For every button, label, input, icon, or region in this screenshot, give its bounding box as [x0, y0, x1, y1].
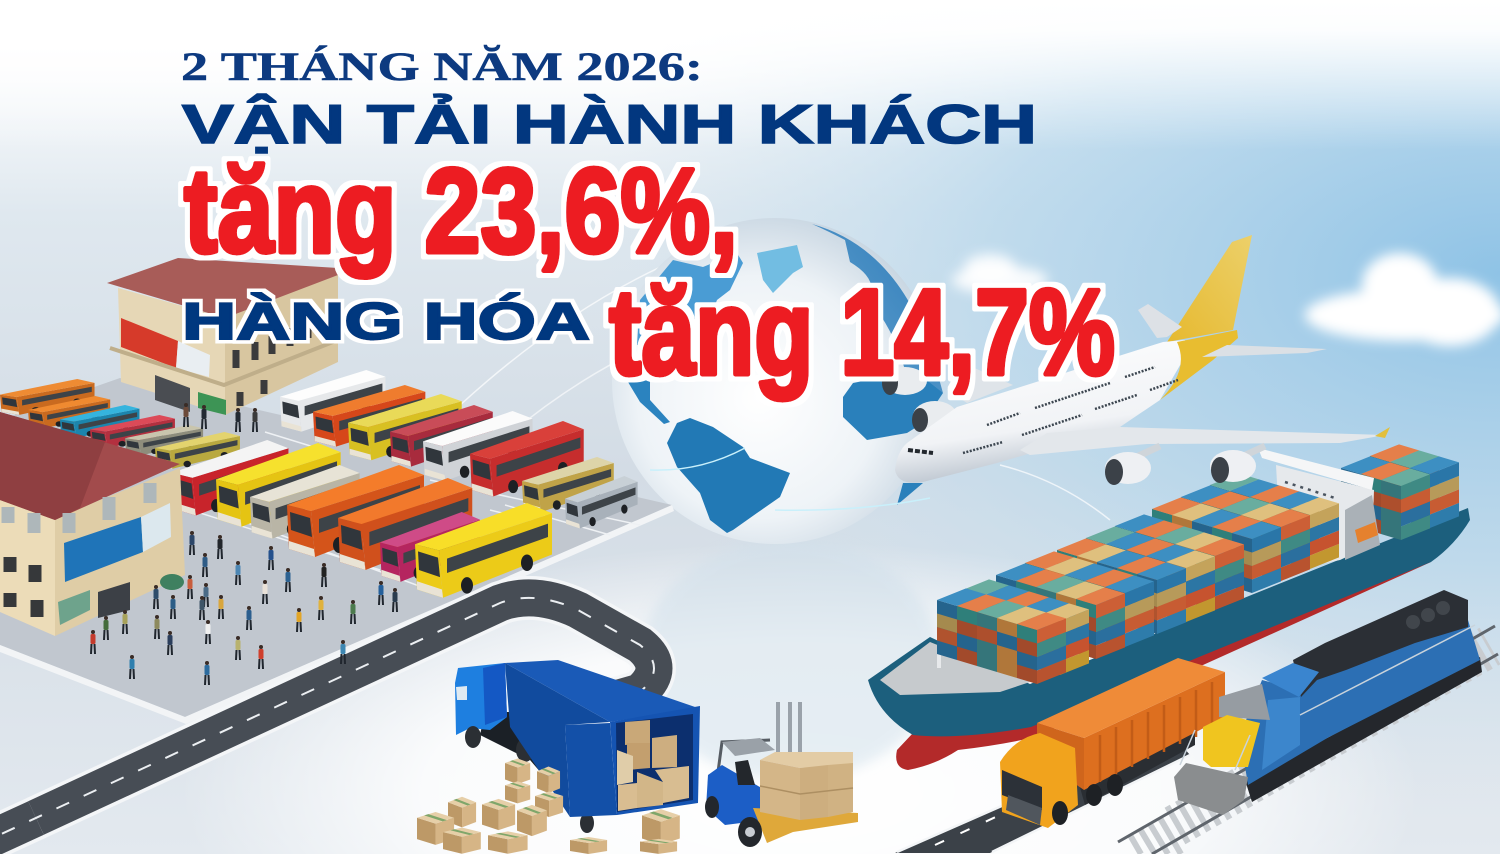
- middle row coaches: [280, 370, 638, 528]
- grey front hood: [1219, 684, 1270, 720]
- rear frame: [610, 706, 700, 815]
- near wing: [1020, 427, 1385, 455]
- north america landmass: [637, 253, 743, 345]
- windows: [963, 367, 1178, 453]
- container long side: [1084, 672, 1225, 790]
- roof: [107, 258, 338, 318]
- cab side highlight: [1262, 697, 1300, 770]
- container side: [505, 663, 610, 817]
- yellow nose: [1203, 715, 1260, 767]
- right wall: [55, 468, 185, 636]
- red banner: [121, 318, 178, 368]
- black hood roof: [1293, 590, 1468, 697]
- tail fin: [1167, 235, 1252, 342]
- pallet: [753, 808, 858, 843]
- globe: [612, 218, 943, 544]
- far wing: [947, 363, 1013, 403]
- goods growth figure: tăng 14,7%: [609, 264, 1115, 400]
- grey front skirt: [1174, 763, 1248, 815]
- forklift with cartons: [705, 702, 858, 847]
- truck road: [895, 732, 1190, 853]
- passenger transport heading: VẬN TẢI HÀNH KHÁCH: [182, 93, 1037, 155]
- kicker line: 2 THÁNG NĂM 2026:: [181, 44, 703, 89]
- africa landmass: [843, 367, 943, 440]
- rear wheel: [580, 813, 594, 833]
- cab: [455, 663, 507, 735]
- body: [706, 765, 765, 825]
- stacked cartons: [760, 752, 853, 820]
- shrubs: [160, 574, 184, 590]
- ground floor entrance: [155, 375, 190, 412]
- airplane: [882, 235, 1390, 485]
- chassis: [480, 712, 560, 795]
- upper windows: [8, 483, 150, 533]
- container ship: [868, 444, 1470, 770]
- rail track: [1118, 626, 1498, 854]
- deck container stacks: [937, 473, 1339, 684]
- entrance: [98, 582, 130, 618]
- left wall: [0, 498, 55, 636]
- fuselage: [895, 340, 1185, 483]
- white advert: [176, 341, 210, 377]
- goods heading: HÀNG HÓA: [182, 293, 590, 351]
- left wall: [118, 288, 225, 415]
- door panel: [565, 723, 617, 817]
- windows: [236, 322, 308, 406]
- billboard photo: [141, 503, 171, 552]
- blue delivery truck: [455, 660, 700, 833]
- cartons on ground: [417, 758, 680, 854]
- orange container truck: [1000, 658, 1225, 828]
- right wall: [225, 275, 338, 415]
- red keel: [896, 562, 1431, 770]
- container roof: [505, 660, 698, 722]
- open rear: [616, 714, 693, 812]
- lower bus station building: [0, 412, 185, 636]
- clouds: [952, 253, 1500, 346]
- parking lot: [0, 378, 674, 724]
- far engines: [882, 367, 957, 432]
- south america landmass: [667, 418, 790, 533]
- wheels: [705, 796, 719, 818]
- greenland: [757, 245, 803, 293]
- near engines: [1105, 446, 1265, 485]
- stern container stacks: [1341, 444, 1459, 540]
- road: [0, 598, 654, 854]
- cab wheels: [465, 726, 481, 748]
- northern ocean: [812, 224, 943, 393]
- globe reflection: [640, 540, 940, 780]
- back row coaches: [0, 379, 240, 469]
- locomotive: [1174, 590, 1482, 815]
- central america: [628, 380, 670, 424]
- handrails: [1180, 625, 1475, 770]
- upper bus station building: [107, 258, 338, 415]
- cab roof: [1262, 663, 1319, 697]
- cab: [1000, 733, 1078, 828]
- balcony band: [110, 340, 338, 385]
- chassis: [1075, 712, 1195, 805]
- wheels: [1052, 801, 1068, 825]
- container roof: [1037, 658, 1225, 738]
- container end: [1037, 723, 1084, 790]
- mast: [778, 702, 800, 760]
- superstructure: [1258, 448, 1380, 572]
- cargo cartons inside: [617, 720, 689, 811]
- lower windows: [10, 557, 37, 617]
- roof: [0, 412, 180, 520]
- blue body: [1240, 620, 1480, 785]
- passengers: [90, 403, 398, 685]
- yellow tail cone: [1160, 330, 1238, 400]
- bow deck: [880, 642, 1030, 695]
- route arcs: [650, 448, 930, 510]
- overhead guard: [718, 740, 770, 830]
- front row coaches: [172, 440, 552, 598]
- title: [181, 44, 1115, 400]
- passenger growth figure: tăng 23,6%,: [184, 144, 738, 278]
- teal hull: [868, 508, 1470, 736]
- right stabiliser: [1202, 345, 1327, 357]
- blue billboard: [64, 517, 143, 582]
- left stabiliser: [1138, 304, 1182, 338]
- undercarriage: [1245, 657, 1482, 802]
